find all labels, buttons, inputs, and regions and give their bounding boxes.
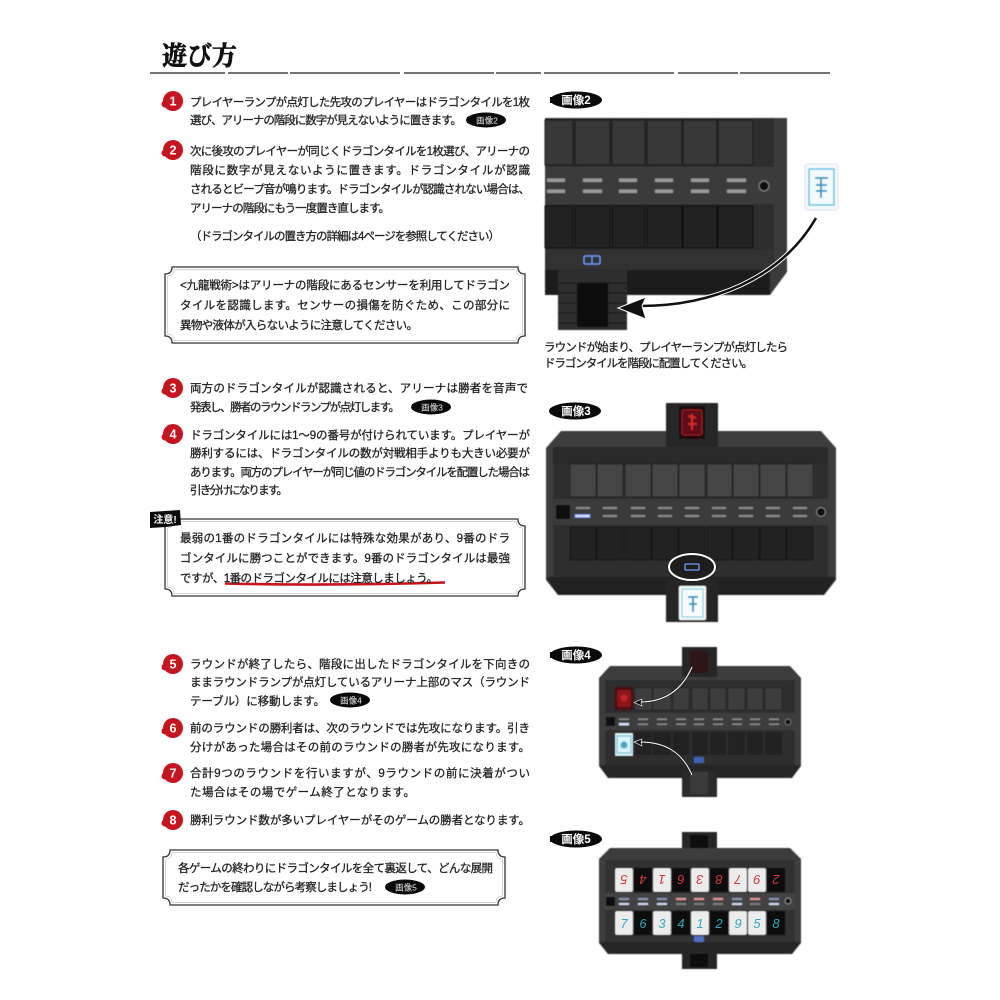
- step 3 number: 3: [170, 382, 177, 396]
- step 3: [162, 378, 528, 414]
- step 5 text: [190, 657, 530, 708]
- step 4 text: 勝利するには、ドラゴンタイルの数が対戦相手よりも大きい必要が: [190, 446, 530, 460]
- lower tile row: 9: [734, 916, 742, 931]
- arena close-up: [545, 118, 787, 295]
- step 8 number: 8: [170, 814, 177, 828]
- step 2 text: されるとビープ音が鳴ります。ドラゴンタイルが認識されない場合は、: [190, 182, 530, 196]
- step 3 text: [190, 381, 528, 414]
- callout: sensor: [165, 267, 525, 343]
- badge: 画像3: 画像3: [561, 404, 591, 418]
- upper tile row: 5: [620, 872, 628, 887]
- caption: ドラゴンタイルを階段に配置してください。: [544, 356, 753, 370]
- badge: 画像3: [549, 402, 601, 420]
- scoreboard icon: [606, 717, 615, 726]
- callout: sensor: <九龍戦術>はアリーナの階段にあるセンサーを利用してドラゴン: [180, 278, 510, 292]
- step 6: [162, 718, 530, 754]
- step 4 text: [190, 428, 530, 497]
- step 8 text: 勝利ラウンド数が多いプレイヤーがそのゲームの勝者となります。: [190, 813, 530, 827]
- lower tile row: 7: [620, 916, 628, 931]
- step 7 text: [190, 766, 530, 799]
- lower tile row: 4: [677, 916, 685, 931]
- arena board: [599, 666, 801, 778]
- step 5 number: [162, 654, 183, 674]
- upper tile row: 1: [658, 872, 666, 887]
- step 3 text: 発表し、勝者のラウンドランプが点灯します。: [190, 400, 400, 414]
- step 5 text: テーブル）に移動します。: [190, 694, 325, 708]
- step 2 number: 2: [170, 144, 177, 158]
- step 1: [162, 91, 530, 128]
- step 6 number: [162, 718, 183, 738]
- step 7 text: 合計9つのラウンドを行いますが、9ラウンドの前に決着がつい: [190, 766, 530, 780]
- step 7: [162, 763, 530, 799]
- arrow: [618, 218, 816, 319]
- step 5 text: ままラウンドランプが点灯しているアリーナ上部のマス（ラウンド: [190, 675, 530, 689]
- step 2 text: [190, 144, 530, 215]
- upper tile row: 6: [677, 872, 685, 887]
- badge: 画像2: 画像2: [561, 93, 591, 107]
- step 1 number: [162, 91, 183, 111]
- step 7 number: [162, 763, 183, 783]
- highlight ellipse: [668, 553, 716, 581]
- step 8 number: [162, 810, 183, 830]
- upper tile row: 8: [715, 872, 723, 887]
- step 8: [162, 810, 530, 830]
- upper tile row: 3: [696, 872, 704, 887]
- caution underline: [225, 582, 445, 585]
- lit round lamp: [575, 514, 590, 518]
- step 7 text: た場合はその場でゲーム終了となります。: [190, 785, 415, 799]
- title: 遊び方: [162, 42, 237, 71]
- step 2: [162, 140, 530, 215]
- caution label: [150, 510, 181, 528]
- step 1 text: プレイヤーランプが点灯した先攻のプレイヤーはドラゴンタイルを1枚: [190, 95, 530, 109]
- panel: image 2: [544, 92, 838, 370]
- step 4 number: 4: [170, 428, 177, 442]
- moved blue tile: [615, 733, 633, 756]
- upper tile row: 7: [734, 872, 742, 887]
- upper tile row: 4: [639, 872, 647, 887]
- lower tile row: 3: [658, 916, 666, 931]
- badge: 画像4: [550, 646, 602, 664]
- step 3 number: [162, 378, 183, 398]
- callout: caution: ゴンタイルに勝つことができます。9番のドラゴンタイルは最強: [180, 551, 510, 565]
- step 4 number: [162, 424, 183, 444]
- step 5: [162, 654, 530, 708]
- callout: review: [163, 850, 505, 905]
- callout: review: 各ゲームの終わりにドラゴンタイルを全て裏返して、どんな展開: [178, 861, 493, 875]
- badge 画像3: 画像3: [421, 402, 443, 412]
- callout: caution: ですが、1番のドラゴンタイルには注意しましょう。: [180, 571, 438, 585]
- badge 画像2: 画像2: [476, 116, 498, 126]
- step 7 number: 7: [170, 766, 177, 780]
- step 6 number: 6: [170, 722, 177, 736]
- panel: image 3: [546, 402, 836, 622]
- panel: image 5: [550, 830, 801, 969]
- step 2 text: 階段に数字が見えないように置きます。ドラゴンタイルが認識: [190, 163, 530, 177]
- blue logo: [694, 936, 704, 942]
- lower tile row: 2: [714, 916, 723, 931]
- step 6 text: 分けがあった場合はその前のラウンドの勝者が先攻になります。: [190, 740, 530, 754]
- step 1 number: 1: [170, 94, 177, 108]
- step 4 text: 引き分けになります。: [190, 483, 288, 497]
- upper tile row: 9: [753, 872, 761, 887]
- step 1 text: 選び、アリーナの階段に数字が見えないように置きます。: [190, 113, 462, 127]
- step 6 text: [190, 721, 530, 754]
- lower tile row: [615, 911, 785, 935]
- badge: 画像2: [550, 92, 602, 108]
- badge: 画像5: [550, 830, 602, 848]
- step 3 text: 両方のドラゴンタイルが認識されると、アリーナは勝者を音声で: [190, 381, 528, 395]
- lower tile row: 5: [753, 916, 761, 931]
- lit round lamp: [619, 723, 629, 725]
- badge: 画像5: 画像5: [561, 832, 591, 846]
- moved red tile: [615, 687, 633, 710]
- slots: [682, 647, 717, 797]
- upper tile row: [615, 868, 785, 892]
- callout: sensor: タイルを認識します。センサーの損傷を防ぐため、この部分に: [180, 298, 510, 312]
- arena board: [599, 848, 801, 954]
- lower tile row: 1: [696, 916, 704, 931]
- bottom slot with blue tile: [666, 580, 718, 622]
- callout: caution: [150, 510, 525, 596]
- upper tile row: 2: [772, 872, 781, 887]
- step 1 text: [190, 95, 530, 127]
- callout: review: だったかを確認しながら考察しましょう!: [178, 880, 372, 894]
- badge 画像4: 画像4: [340, 696, 362, 706]
- step 2 text: 次に後攻のプレイヤーが同じくドラゴンタイルを1枚選び、アリーナの: [190, 144, 530, 158]
- badge 画像2: [466, 112, 506, 128]
- step 4 text: あります。両方のプレイヤーが同じ値のドラゴンタイルを配置した場合は: [190, 465, 530, 479]
- stair slot: [558, 270, 627, 330]
- step 4 text: ドラゴンタイルには1～9の番号が付けられています。プレイヤーが: [190, 428, 530, 442]
- lower tile row: 6: [639, 916, 647, 931]
- arena board: [546, 431, 836, 595]
- caption: ラウンドが始まり、プレイヤーランプが点灯したら: [544, 340, 788, 354]
- badge 画像4: [330, 692, 370, 708]
- lamps: [619, 898, 779, 905]
- dragon tile: [805, 164, 838, 210]
- badge 画像3: [411, 400, 451, 414]
- badge 画像5: 画像5: [395, 882, 417, 892]
- step 5 text: ラウンドが終了したら、階段に出したドラゴンタイルを下向きの: [190, 657, 530, 671]
- arrows: [634, 667, 692, 775]
- scoreboard icon: [556, 505, 570, 519]
- caption: [544, 340, 788, 370]
- blue logo: [584, 256, 600, 264]
- callout: sensor: 異物や液体が入らないように注意してください。: [180, 318, 418, 332]
- badge: 画像4: 画像4: [561, 648, 591, 662]
- step 4: [162, 424, 530, 497]
- blue logo: [694, 757, 704, 763]
- lower tile row: 8: [772, 916, 780, 931]
- note: page reference: （ドラゴンタイルの置き方の詳細は4ページを参照してください）: [190, 229, 500, 243]
- step 5 number: 5: [170, 658, 177, 672]
- callout: caution: 最弱の1番のドラゴンタイルには特殊な効果があり、9番のドラ: [180, 531, 510, 545]
- badge 画像5: [385, 880, 425, 894]
- slots: [682, 832, 717, 969]
- top slot with red tile: [666, 403, 718, 447]
- step 2 text: アリーナの階段にもう一度置き直します。: [190, 201, 390, 215]
- step 6 text: 前のラウンドの勝利者は、次のラウンドでは先攻になります。引き: [190, 721, 530, 735]
- panel: image 4: [550, 646, 801, 797]
- caution label: 注意!: [153, 513, 177, 526]
- step 2 number: [162, 140, 183, 160]
